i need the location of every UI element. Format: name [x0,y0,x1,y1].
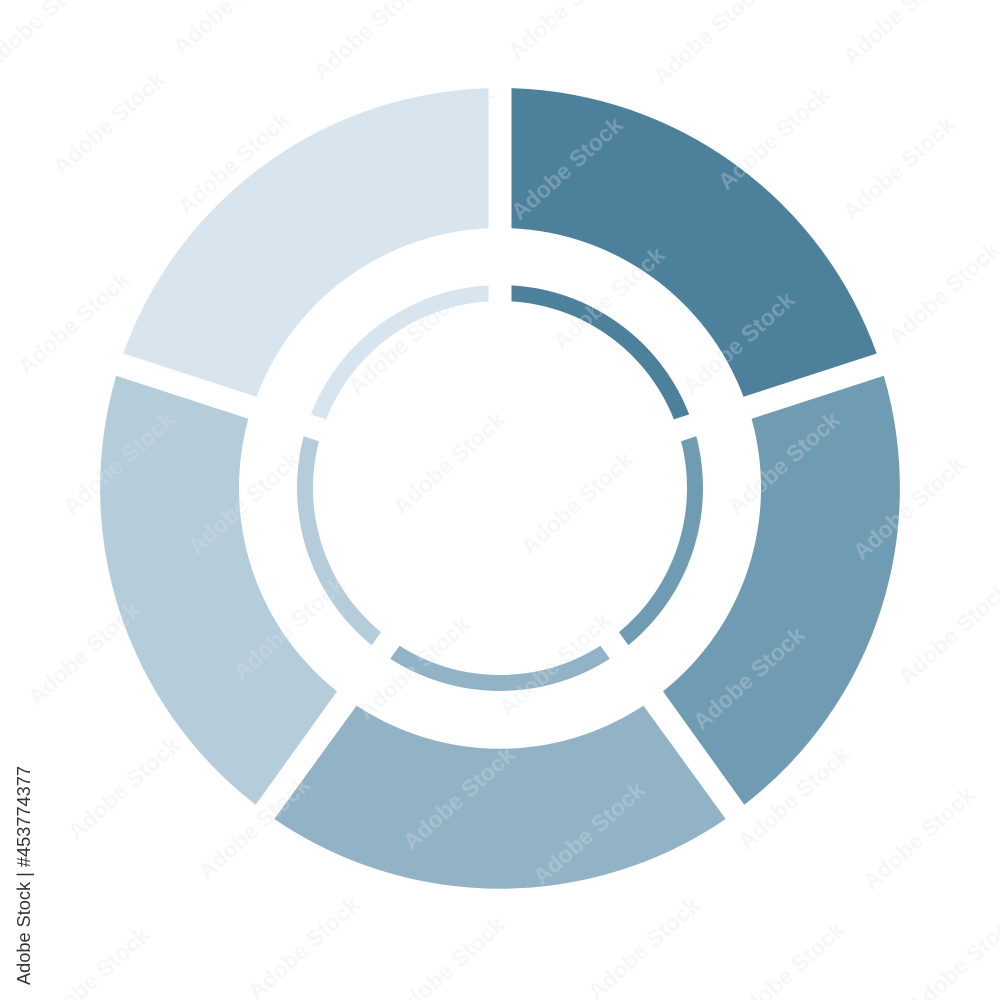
watermark pattern: Adobe Stock [388,406,510,520]
watermark pattern: Adobe Stock [378,81,500,195]
inner thin ring [297,285,703,691]
inner arc 5: lightest blue [311,285,488,419]
watermark pattern: Adobe Stock [516,446,638,560]
watermark pattern: Adobe Stock [838,111,960,225]
watermark pattern: Adobe Stock [63,731,185,845]
watermark pattern: Adobe Stock [678,286,800,400]
watermark pattern: Adobe Stock [13,266,135,380]
inner arc 3: soft blue [390,646,610,691]
watermark pattern: Adobe Stock [848,451,970,565]
inner arc 1: dark teal [512,285,689,419]
watermark pattern: Adobe Stock [193,771,315,885]
outer segment 5: lightest blue [123,88,489,397]
watermark pattern: Adobe Stock [506,111,628,225]
watermark pattern: Adobe Stock [723,406,845,520]
watermark pattern: Adobe Stock [343,286,465,400]
outer segment 3: soft blue [274,706,726,889]
watermark pattern: Adobe Stock [23,596,145,710]
outer segment 1: dark teal [512,88,877,397]
watermark pattern: Adobe Stock [173,106,295,220]
watermark pattern: Adobe Stock [58,406,180,520]
watermark pattern: Adobe Stock [548,241,670,355]
watermark pattern: Adobe Stock [688,621,810,735]
outer segment 2: medium teal [663,376,900,805]
inner arc 4: pale blue [297,436,381,645]
watermark pattern: Adobe Stock [218,236,340,350]
inner arc 2: medium teal [619,436,703,645]
watermark pattern: Adobe Stock [183,446,305,560]
outer segment 4: pale blue [100,376,337,805]
watermark pattern: Adobe Stock [713,81,835,195]
watermark pattern: Adobe Stock [494,607,616,721]
watermark pattern: Adobe Stock [398,741,520,855]
watermark pattern: Adobe Stock [858,781,980,895]
watermark pattern: Adobe Stock [353,611,475,725]
watermark pattern: Adobe Stock [48,66,170,180]
watermark pattern: Adobe Stock [528,776,650,890]
watermark pattern: Adobe Stock [733,741,855,855]
vertical stock credit text: Adobe Stock | #453774377 [14,766,34,985]
outer donut ring [100,88,900,889]
watermark pattern: Adobe Stock [228,571,350,685]
